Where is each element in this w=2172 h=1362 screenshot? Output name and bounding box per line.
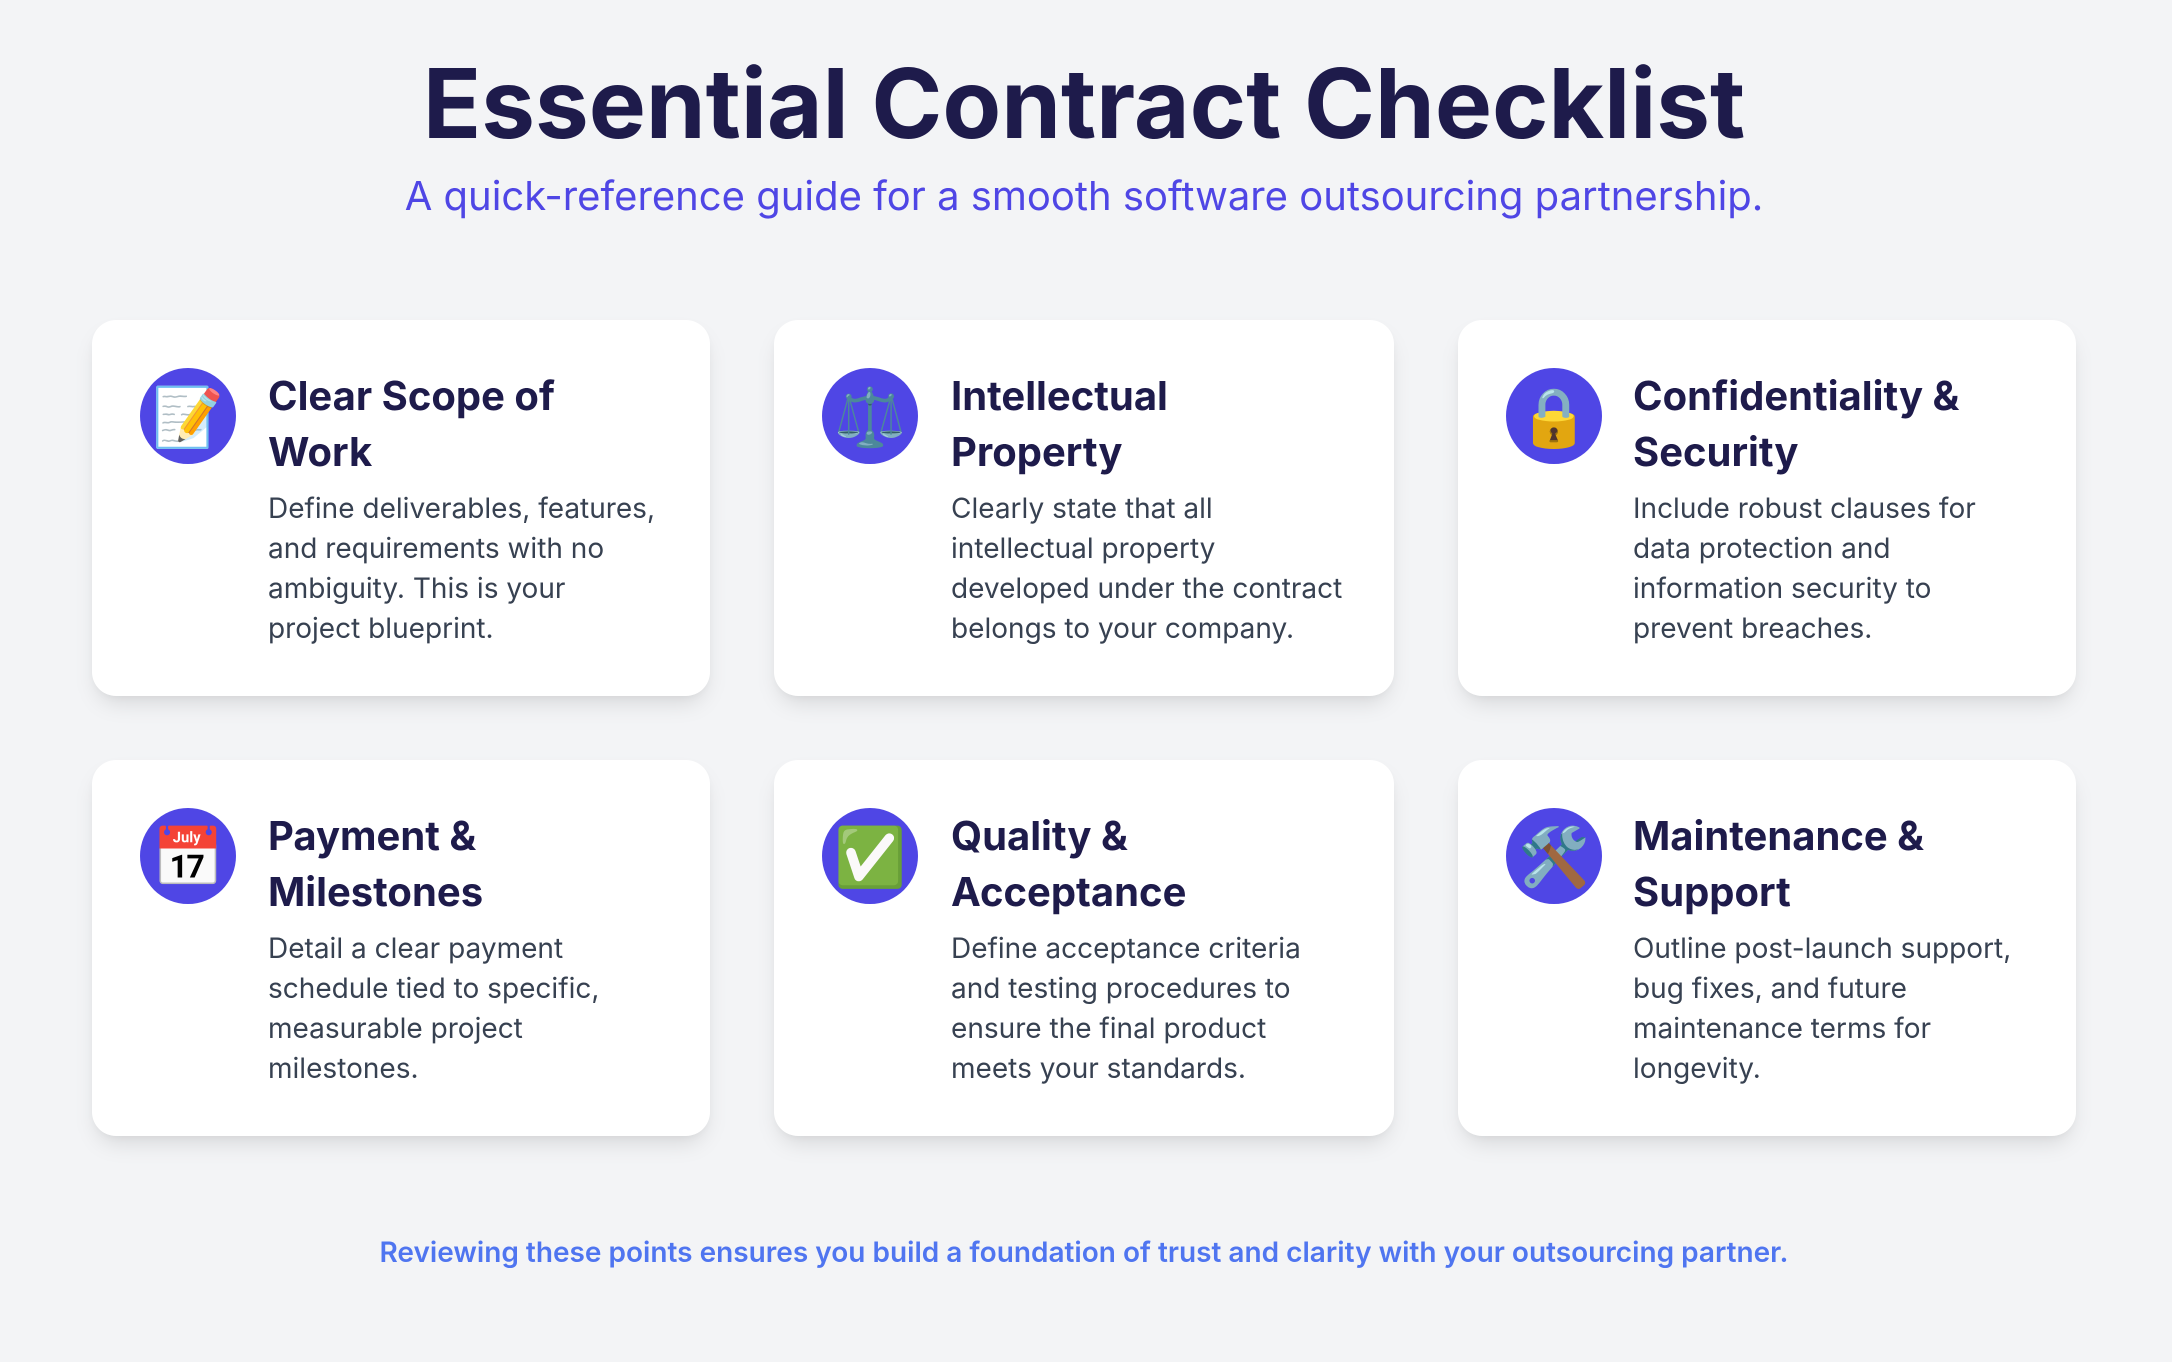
heading: clear scope of work — [268, 371, 555, 476]
text: maintenance description — [1633, 931, 2011, 1085]
footer note: Reviewing these points ensures you build a foundation of trust and clarity with your outsourcing partner. — [380, 1235, 1788, 1269]
text: maintenance description: Outline post-launch support, — [1633, 931, 2011, 965]
text: intellectual property description: developed under the contract — [951, 571, 1342, 605]
text: payment description — [268, 931, 599, 1085]
text: quality description: meets your standards. — [951, 1051, 1246, 1085]
icon: balance scale: ⚖️ — [834, 384, 906, 452]
text: maintenance description: longevity. — [1633, 1051, 1761, 1085]
text: intellectual property description: belongs to your company. — [951, 611, 1294, 645]
text: payment description: schedule tied to specific, — [268, 971, 599, 1005]
icon: calendar: 📅 — [152, 824, 224, 892]
text: confidentiality description: Include robust clauses for — [1633, 491, 1976, 525]
heading: maintenance and support — [1633, 811, 1924, 916]
panel: maintenance and support — [1458, 760, 2076, 1144]
heading: payment and milestones: Milestones — [268, 867, 483, 916]
text: confidentiality description: prevent breaches. — [1633, 611, 1872, 645]
text: confidentiality description — [1633, 491, 1976, 645]
heading: clear scope of work: Clear Scope of — [268, 371, 555, 420]
text: quality description: ensure the final product — [951, 1011, 1266, 1045]
heading: intellectual property — [951, 371, 1168, 476]
text: clear scope description — [268, 491, 655, 645]
heading: intellectual property: Property — [951, 427, 1122, 476]
icon: calendar — [140, 808, 236, 904]
icon: check mark: ✅ — [834, 824, 906, 892]
subtitle: A quick-reference guide for a smooth software outsourcing partnership. — [405, 171, 1763, 220]
icon: padlock — [1506, 368, 1602, 464]
heading: maintenance and support: Maintenance & — [1633, 811, 1924, 860]
text: quality description: and testing procedures to — [951, 971, 1291, 1005]
heading: quality and acceptance — [951, 811, 1186, 916]
icon: memo and pencil: 📝 — [152, 384, 224, 452]
text: intellectual property description: intellectual property — [951, 531, 1215, 565]
title: Essential Contract Checklist — [423, 46, 1745, 162]
text: clear scope description: and requirements with no — [268, 531, 604, 565]
panel: intellectual property — [774, 320, 1394, 704]
icon: balance scale — [822, 368, 918, 464]
panel: confidentiality and security — [1458, 320, 2076, 704]
icon: padlock: 🔒 — [1518, 385, 1590, 452]
text: maintenance description: maintenance terms for — [1633, 1011, 1931, 1045]
heading: quality and acceptance: Acceptance — [951, 867, 1186, 916]
text: payment description: milestones. — [268, 1051, 419, 1085]
icon: hammer and wrench — [1506, 808, 1602, 904]
text: quality description — [951, 931, 1301, 1085]
panel: clear scope of work — [92, 320, 710, 704]
heading: clear scope of work: Work — [268, 427, 373, 476]
text: payment description: Detail a clear payment — [268, 931, 563, 965]
text: clear scope description: project blueprint. — [268, 611, 494, 645]
heading: payment and milestones — [268, 811, 483, 916]
text: clear scope description: Define deliverables, features, — [268, 491, 655, 525]
heading: intellectual property: Intellectual — [951, 371, 1168, 420]
heading: payment and milestones: Payment & — [268, 811, 476, 860]
icon: memo and pencil — [140, 368, 236, 464]
text: confidentiality description: data protection and — [1633, 531, 1891, 565]
text: intellectual property description: Clearly state that all — [951, 491, 1213, 525]
icon: check mark — [822, 808, 918, 904]
text: confidentiality description: information security to — [1633, 571, 1931, 605]
text: payment description: measurable project — [268, 1011, 523, 1045]
text: intellectual property description — [951, 491, 1342, 645]
heading: quality and acceptance: Quality & — [951, 811, 1128, 860]
heading: maintenance and support: Support — [1633, 867, 1791, 916]
heading: confidentiality and security: Confidentiality & — [1633, 371, 1960, 420]
text: quality description: Define acceptance criteria — [951, 931, 1301, 965]
heading: confidentiality and security: Security — [1633, 427, 1798, 476]
text: maintenance description: bug fixes, and future — [1633, 971, 1907, 1005]
heading: confidentiality and security — [1633, 371, 1960, 476]
panel: payment and milestones — [92, 760, 710, 1144]
panel: quality and acceptance — [774, 760, 1394, 1144]
text: clear scope description: ambiguity. This is your — [268, 571, 565, 605]
icon: hammer and wrench: 🛠️ — [1518, 823, 1590, 892]
